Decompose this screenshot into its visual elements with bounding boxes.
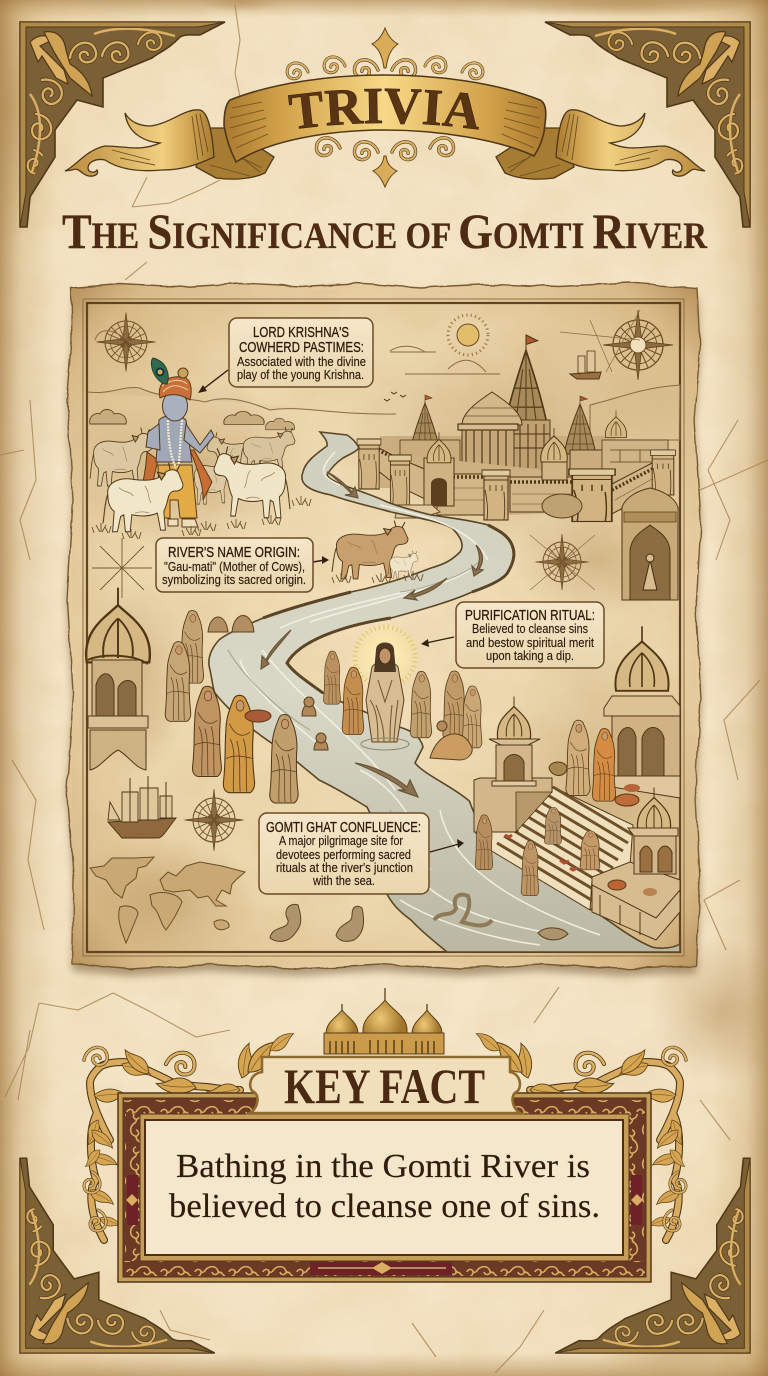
map: compass mid right: [530, 534, 595, 590]
key fact body text: believed to cleanse one of sins.: [169, 1188, 600, 1225]
map: small shrine: [489, 696, 540, 786]
ornament: foliage scrolls around key fact: [80, 1032, 690, 1240]
map: river flow arrows: [261, 472, 483, 797]
callout: purification ritual: PURIFICATION RITUAL:: [465, 607, 595, 624]
main title: THE SIGNIFICANCE OF GOMTI RIVER: [62, 203, 708, 259]
callout: river's name origin: symbolizing its sacred origin.: [162, 572, 306, 587]
map: star lines left: [92, 538, 152, 598]
map: compass lower: [185, 789, 243, 851]
callout: purification ritual: Believed to cleanse sins: [472, 621, 588, 636]
map: city fort and temple: [357, 335, 676, 522]
callout: purification ritual: and bestow spiritual merit: [466, 635, 594, 650]
panel: key fact frame: [118, 1093, 651, 1282]
map: clouds and hills: [88, 331, 680, 440]
map: sun: [448, 315, 488, 355]
callout: Gomti Ghat confluence: devotees performing sacred: [276, 847, 411, 862]
callout: Gomti Ghat confluence: with the sea.: [312, 873, 375, 888]
callout: Lord Krishna's cowherd pastimes: COWHERD PASTIMES:: [239, 339, 364, 356]
corner ornament: top right: [545, 22, 750, 227]
arrow: to brown cow: [313, 556, 329, 564]
map: ornate archway: [622, 488, 678, 600]
arrow: to Krishna: [198, 370, 228, 393]
callout: river's name origin: RIVER'S NAME ORIGIN:: [168, 544, 300, 561]
arrow: to saint: [421, 637, 454, 647]
callout: Lord Krishna's cowherd pastimes: LORD KRISHNA'S: [253, 324, 349, 341]
panel: ghat steps: [474, 778, 680, 940]
callout: Gomti Ghat confluence: GOMTI GHAT CONFLUENCE:: [266, 819, 421, 836]
map: lower shrine: [628, 788, 678, 874]
callout: Gomti Ghat confluence: rituals at the river's junction: [276, 860, 413, 875]
callout: river's name origin: [156, 538, 313, 592]
map: halo: [351, 623, 419, 691]
map: sea serpents: [270, 895, 568, 941]
bottom flourish below banner: [316, 138, 454, 187]
map: brown cow with calf: [332, 521, 423, 583]
arrow: to ghat: [430, 839, 464, 852]
callout: Lord Krishna's cowherd pastimes: [229, 318, 373, 387]
map: Krishna with cows: [92, 358, 311, 539]
map: left pavilion: [86, 588, 150, 770]
map: ship: [108, 776, 176, 838]
key fact body text: Bathing in the Gomti River is: [176, 1148, 590, 1185]
map: river: [209, 432, 680, 952]
map: compass NE: [560, 310, 673, 380]
banner with TRIVIA: [64, 74, 706, 180]
map: sky compass NW: [97, 313, 155, 371]
corner ornament: top left: [20, 22, 225, 227]
callout: Lord Krishna's cowherd pastimes: Associated with the divine: [237, 354, 366, 369]
corner ornament: bottom right: [555, 1158, 750, 1353]
map: ship NE: [570, 351, 601, 379]
callout: Gomti Ghat confluence: A major pilgrimage site for: [279, 833, 404, 848]
panel: parchment map: [60, 283, 715, 976]
callout: purification ritual: upon taking a dip.: [486, 648, 574, 663]
map: birds: [384, 392, 406, 401]
ornament: domes above key fact: [324, 988, 444, 1054]
map: saint and bathers: [302, 642, 409, 750]
banner title: TRIVIA: [288, 88, 479, 130]
map: bushes and herd background: [90, 410, 295, 504]
callout: Lord Krishna's cowherd pastimes: play of the young Krishna.: [237, 367, 364, 382]
callout: Gomti Ghat confluence: [259, 813, 429, 894]
map: devotees right bank: [410, 671, 482, 760]
map: devotees left bank: [165, 611, 298, 803]
callout: purification ritual: [456, 602, 604, 668]
map: large temple: [604, 626, 680, 798]
callout: river's name origin: "Gau-mati" (Mother of Cows),: [164, 559, 305, 574]
key fact body text: [169, 1148, 600, 1225]
top flourish above banner: [287, 28, 483, 79]
map: ghat figures and offerings: [475, 720, 657, 896]
map: world map: [90, 857, 245, 943]
key fact plaque and heading: KEY FACT: [284, 1058, 485, 1114]
corner ornament: bottom left: [20, 1158, 215, 1353]
